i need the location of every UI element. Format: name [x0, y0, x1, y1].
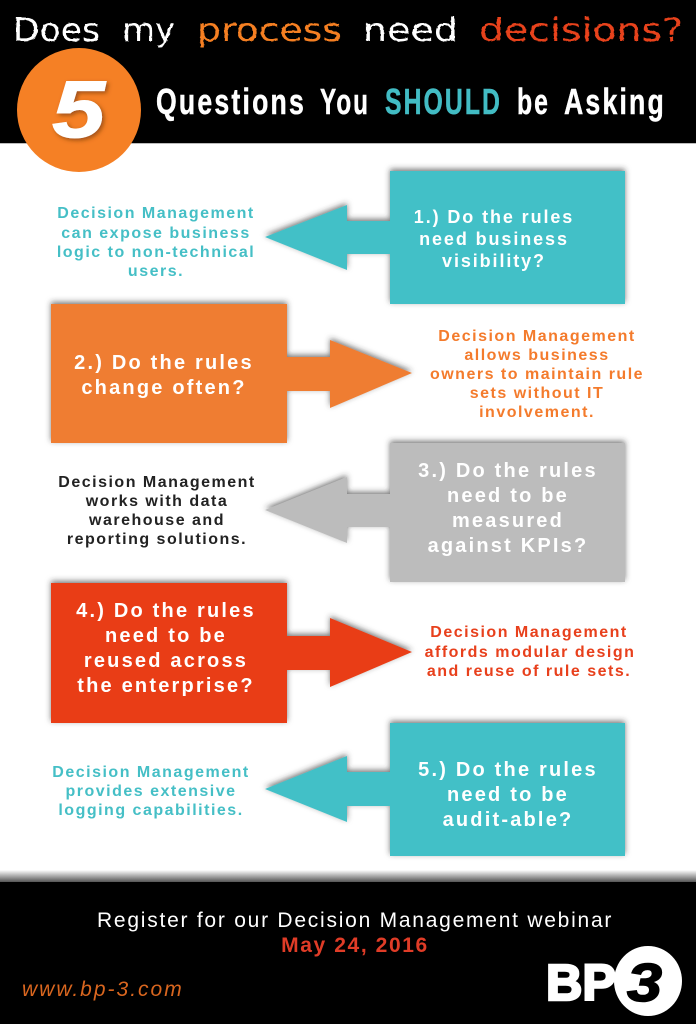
panel: question 1	[57, 171, 625, 304]
panel: question 3	[58, 443, 625, 582]
answer 4 text: affords modular design	[425, 644, 635, 661]
subtitle: 5 Questions You SHOULD be Asking: be	[517, 81, 550, 122]
answer 3 text: Decision Management	[58, 474, 256, 491]
panel: question 2	[51, 304, 644, 443]
answer 1 text: Decision Management	[57, 205, 255, 222]
question 2 text: 2.) Do the rules	[74, 352, 254, 374]
question 3 text: 3.) Do the rules	[418, 460, 598, 482]
title: Does my process need decisions?: process	[197, 11, 342, 49]
answer 3 text: works with data	[85, 493, 228, 510]
title: Does my process need decisions?: need	[363, 11, 458, 49]
answer 2 text: owners to maintain rule	[430, 366, 644, 383]
question 1 text: visibility?	[442, 251, 546, 271]
answer 4 text: Decision Management	[430, 624, 628, 641]
question 2 text: change often?	[81, 377, 247, 399]
badge: number 5	[17, 48, 141, 172]
title: Does my process need decisions?: decisions?	[479, 11, 683, 49]
webinar call to action	[97, 909, 613, 957]
question 5 text: 5.) Do the rules	[418, 759, 598, 781]
answer 3 text: reporting solutions.	[67, 531, 247, 548]
arrow and box 1	[265, 171, 625, 304]
question 5 text: need to be	[447, 784, 569, 806]
footer band	[0, 870, 696, 1024]
header band	[0, 0, 696, 144]
answer 2 text: involvement.	[479, 404, 595, 421]
question 4 text: need to be	[105, 625, 227, 647]
subtitle: 5 Questions You SHOULD be Asking: You	[320, 81, 370, 122]
question 5 text: audit-able?	[443, 809, 573, 831]
answer 4 text: and reuse of rule sets.	[427, 663, 631, 680]
question 1 text: 1.) Do the rules	[414, 207, 574, 227]
arrow and box 2	[51, 304, 412, 443]
arrow and box 4	[51, 583, 412, 723]
answer 2 text: allows business	[464, 347, 610, 364]
website url: www.bp-3.com	[22, 978, 184, 1001]
subtitle: 5 Questions You SHOULD be Asking: SHOULD	[385, 81, 502, 122]
title: Does my process need decisions?	[13, 11, 683, 49]
question 3 text: against KPIs?	[428, 535, 588, 557]
question 4 text: 4.) Do the rules	[76, 600, 256, 622]
webinar call to action: Register for our Decision Management webinar	[97, 909, 613, 932]
question 3 text: need to be	[447, 485, 569, 507]
panel: question 5	[52, 723, 625, 856]
answer 3 text: warehouse and	[88, 512, 225, 529]
answer 1 text: logic to non-technical	[57, 244, 255, 261]
answer 5 text: logging capabilities.	[58, 802, 244, 819]
arrow and box 5	[265, 723, 625, 856]
logo: BP3: BP	[546, 954, 616, 1011]
question 4 text: reused across	[84, 650, 248, 672]
logo: BP3: 3	[627, 953, 662, 1013]
title: Does my process need decisions?: Does	[13, 11, 100, 49]
question 3 text: measured	[452, 510, 564, 532]
subtitle: 5 Questions You SHOULD be Asking: Questions	[156, 81, 306, 122]
answer 1 text: can expose business	[61, 225, 251, 242]
webinar date: May 24, 2016	[281, 934, 429, 957]
title: Does my process need decisions?: my	[122, 11, 175, 49]
arrow and box 3	[265, 443, 625, 582]
logo: BP3	[546, 946, 682, 1016]
panel: question 4	[51, 583, 635, 723]
answer 2 text: sets without IT	[470, 385, 604, 402]
subtitle: 5 Questions You SHOULD be Asking	[156, 81, 666, 122]
badge: number 5: 5	[52, 65, 106, 155]
answer 5 text: Decision Management	[52, 764, 250, 781]
question 1 text: need business	[419, 229, 569, 249]
answer 1 text: users.	[128, 263, 184, 280]
question 4 text: the enterprise?	[77, 675, 255, 697]
answer 2 text: Decision Management	[438, 328, 636, 345]
answer 5 text: provides extensive	[65, 783, 237, 800]
